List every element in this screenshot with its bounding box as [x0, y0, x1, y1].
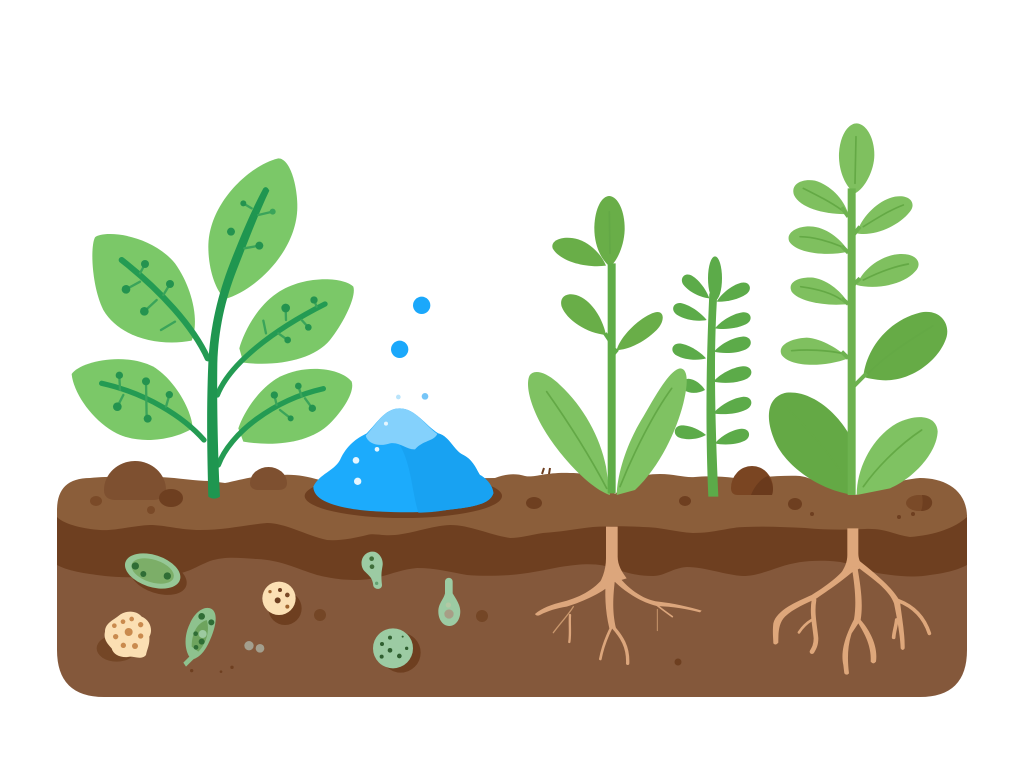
microbe: grey spores: [244, 641, 264, 653]
left root: [773, 560, 858, 645]
plant A big left leaf: [528, 372, 610, 495]
roots of the middle plant: [535, 527, 702, 663]
plant B stem: [706, 293, 718, 497]
pile hole: [305, 474, 502, 518]
microbe: elongated green cell: [183, 608, 216, 667]
soil cross-section: [57, 461, 967, 697]
root branches: [553, 605, 672, 663]
plant C veins: [785, 137, 933, 487]
droplets: [391, 297, 430, 400]
central root: [842, 567, 876, 675]
plant B: fern: [670, 256, 753, 497]
left root: [535, 573, 614, 616]
main stem: [207, 187, 269, 499]
taproot: [838, 528, 863, 577]
soil small twig: [542, 468, 550, 474]
soil stone: [731, 466, 773, 495]
pile sparkles: [353, 422, 388, 485]
plant B left leaflets: [670, 271, 713, 442]
central root: [605, 577, 616, 628]
microbe: cream lumpy cell: [97, 612, 151, 662]
soil pebbles: [90, 489, 932, 666]
soil stone shade: [751, 476, 773, 495]
plant C big right leaf: [857, 417, 938, 495]
branches: [102, 260, 325, 465]
microbe: flask cell large: [438, 578, 460, 626]
soil mound left: [104, 461, 166, 500]
taproot: [595, 527, 627, 590]
pile shaded side: [400, 433, 493, 513]
plant C branch stubs: [842, 207, 867, 387]
roots of the right plant: [773, 528, 929, 675]
pile body: [313, 408, 493, 512]
fertilizer pile with droplets: [305, 297, 502, 518]
plant A leaf stalks: [605, 333, 617, 357]
soil specks: [190, 666, 234, 673]
plant C: tall broadleaf: [769, 123, 947, 495]
leaves: [72, 158, 354, 444]
microbe: green round spotted cell: [373, 628, 421, 673]
microbe: cream round cell: [262, 582, 302, 625]
plant A: tall herb: [528, 196, 687, 495]
right group of plants: [528, 123, 947, 497]
microbe: flask cell small: [362, 552, 383, 589]
right root: [610, 572, 702, 612]
soil dark middle layer: [57, 517, 967, 580]
left plant: [72, 158, 354, 499]
plant B top leaf: [708, 256, 722, 300]
soil mound small: [250, 467, 287, 490]
plant C big left leaf: [769, 392, 855, 495]
microbes: [97, 547, 460, 673]
pile light cap: [366, 408, 437, 449]
plant A big right leaf: [617, 368, 687, 495]
plant C small leaves: [781, 123, 919, 365]
leaf side veins: [117, 203, 317, 418]
plant C stem: [840, 188, 864, 495]
soil lower layer: [57, 515, 967, 697]
plant A stem: [600, 263, 624, 493]
plant C dark upper leaf: [863, 312, 947, 380]
microbe: green oval: [120, 547, 191, 602]
right root: [855, 560, 905, 650]
soil top layer: [57, 473, 967, 540]
plant B right leaflets: [711, 280, 753, 449]
root branches: [799, 600, 929, 652]
plant A veins: [547, 212, 672, 488]
plant A upper leaves: [552, 196, 663, 350]
leaf vein dots: [113, 200, 318, 423]
